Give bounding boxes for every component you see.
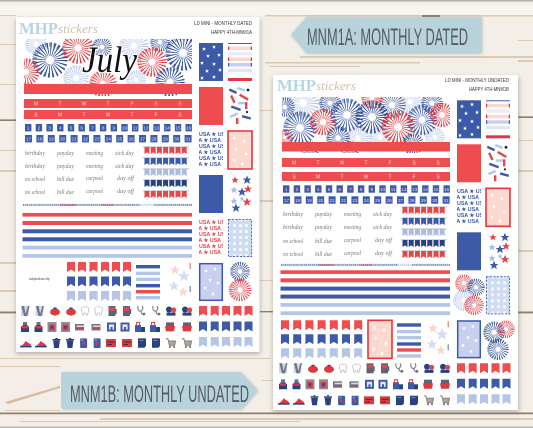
sheet title xyxy=(194,21,252,36)
panel: firecrackers xyxy=(486,144,510,182)
panel: USA blue xyxy=(199,132,223,166)
script event labels: day off xyxy=(375,237,393,244)
script event labels: day off xyxy=(375,250,393,257)
script event labels: bill due xyxy=(57,189,74,196)
panel: solid blue xyxy=(199,175,223,213)
date squares: 23 xyxy=(352,198,358,203)
date squares: 7 xyxy=(91,126,94,130)
script event labels: no school xyxy=(283,238,303,245)
date squares: 4 xyxy=(59,126,62,130)
script event labels: sick day xyxy=(115,163,134,170)
flag rows xyxy=(67,262,131,301)
banner: MNM1B monthly undated: MNM1B: MONTHLY UNDATED xyxy=(70,381,249,408)
date squares: 1 xyxy=(285,187,288,192)
date squares: 9 xyxy=(371,187,374,192)
script event labels: no school xyxy=(25,189,45,196)
weekday strip two: T xyxy=(388,174,392,180)
panel: USA red: USA ★ USA xyxy=(199,219,229,226)
script event labels: bill due xyxy=(315,251,332,258)
date squares: 14 xyxy=(165,126,170,130)
logo xyxy=(19,19,98,38)
date squares: 6 xyxy=(338,187,341,192)
weekday strip one: M xyxy=(292,160,296,166)
flag rows xyxy=(281,320,362,358)
script event labels: birthday xyxy=(25,150,45,157)
date squares: 10 xyxy=(380,187,385,192)
weekday strip one: S xyxy=(436,160,440,166)
logo: MHP xyxy=(277,76,316,95)
script event labels xyxy=(25,150,135,196)
date squares: 2 xyxy=(38,126,41,130)
date squares: 16 xyxy=(186,126,192,130)
date squares: 20 xyxy=(318,198,324,203)
date squares: 3 xyxy=(306,187,309,192)
sheet title xyxy=(445,78,509,93)
red label bar xyxy=(282,142,450,152)
weekday strip two: S xyxy=(34,112,38,118)
planner icons xyxy=(20,306,192,348)
script event labels: meeting xyxy=(86,150,104,157)
panel: star pattern xyxy=(199,43,223,81)
date squares: 8 xyxy=(102,126,105,130)
panel: stars xyxy=(486,232,510,270)
washi strip xyxy=(23,204,192,206)
panel: checklist xyxy=(228,43,252,81)
date squares: 20 xyxy=(60,136,66,142)
planner icons xyxy=(278,363,450,405)
date squares: 17 xyxy=(26,136,31,142)
date squares: 19 xyxy=(307,198,312,203)
panel: pink dotted wide xyxy=(368,320,392,358)
weekday strip one: M xyxy=(34,102,38,108)
red label bar xyxy=(24,84,192,94)
script event labels: meeting xyxy=(86,163,104,170)
date squares: 25 xyxy=(375,198,381,203)
date squares: 13 xyxy=(412,187,418,192)
weekday strip one: F xyxy=(130,102,134,108)
panel: pink dotted xyxy=(228,131,252,169)
date squares: 11 xyxy=(133,126,138,130)
panel: solid blue xyxy=(457,232,481,270)
script event labels: sick day xyxy=(373,224,392,231)
panel: small fireworks xyxy=(228,263,252,301)
weekday strip one: T xyxy=(316,160,320,166)
script event labels: meeting xyxy=(344,211,362,218)
script event labels: no school xyxy=(283,251,303,258)
date squares: 22 xyxy=(83,136,88,142)
banner: MNM1B monthly undated xyxy=(61,372,258,410)
date squares: 13 xyxy=(154,126,160,130)
script event labels: payday xyxy=(56,150,74,157)
date squares: 4 xyxy=(317,187,320,192)
weekday strip two: T xyxy=(130,112,134,118)
panel: USA blue: USA ★ USA xyxy=(449,194,479,201)
month script: July: July xyxy=(82,40,138,81)
weekday strip two: F xyxy=(412,174,416,180)
panel: USA red: USA ★ USA xyxy=(191,249,221,256)
panel: fireworks tile xyxy=(455,276,484,314)
panel: USA blue: USA ★ USA xyxy=(449,206,479,213)
script event labels: birthday xyxy=(283,224,303,231)
date squares: 3 xyxy=(48,126,51,130)
weekday strip one: S xyxy=(178,102,182,108)
panel: gingham xyxy=(228,219,252,257)
panel: gingham xyxy=(486,276,510,314)
weekday strip one xyxy=(282,158,450,167)
logo: stickers xyxy=(58,21,98,36)
weekday strip one: W xyxy=(340,160,345,166)
script event labels: carpool xyxy=(344,250,361,257)
sticker sheet: dated xyxy=(14,17,260,354)
date squares: 19 xyxy=(49,136,54,142)
script event labels: sick day xyxy=(373,211,392,218)
script event labels: payday xyxy=(56,163,74,170)
date squares: 25 xyxy=(117,136,123,142)
weekday strip two xyxy=(282,172,450,181)
date squares: 26 xyxy=(387,198,392,203)
panel: USA blue: USA ★ USA xyxy=(191,161,221,168)
weekday strip two: W xyxy=(106,112,111,118)
script event labels: carpool xyxy=(344,237,361,244)
date squares: 26 xyxy=(129,136,134,142)
logo xyxy=(277,76,356,95)
sheet title: HAPPY 4TH-MNM1A xyxy=(211,30,252,36)
side flags xyxy=(199,306,252,347)
date squares: 7 xyxy=(349,187,352,192)
date squares: 24 xyxy=(364,198,369,203)
weekday strip two: S xyxy=(178,112,182,118)
panel: USA red: USA ★ USA xyxy=(191,237,221,244)
panel: USA blue: USA ★ USA xyxy=(199,143,229,150)
date squares: 22 xyxy=(341,198,346,203)
sheet title: HAPPY 4TH-MNM1B xyxy=(469,87,509,93)
weekday strip two xyxy=(24,110,192,119)
weekday strip two: S xyxy=(292,174,296,180)
full-width colour bars xyxy=(22,213,192,258)
weekday strip two: M xyxy=(316,174,320,180)
date squares: 30 xyxy=(432,198,438,203)
panel: USA red xyxy=(199,220,223,254)
logo: MHP xyxy=(19,19,58,38)
side flags xyxy=(457,363,510,404)
script event labels: bill due xyxy=(57,176,74,183)
date squares: 2 xyxy=(296,187,299,192)
pennant banners xyxy=(143,147,189,198)
panel: pink dotted xyxy=(486,188,510,226)
panel: USA blue: USA ★ USA xyxy=(199,131,229,138)
panel: pale floral xyxy=(425,320,450,359)
full-width colour bars xyxy=(280,270,450,315)
date squares: 15 xyxy=(433,187,439,192)
weekday strip two: M xyxy=(58,112,62,118)
date squares: 31 xyxy=(186,136,191,142)
date squares: 6 xyxy=(80,126,83,130)
script event labels: day off xyxy=(117,188,135,195)
date squares: 11 xyxy=(391,187,396,192)
panel: solid red xyxy=(457,144,481,182)
sheet title: LD MINI - MONTHLY UNDATED xyxy=(445,78,509,84)
panel: star pattern xyxy=(457,100,481,138)
weekday strip one: S xyxy=(412,160,416,166)
script event labels: day off xyxy=(117,175,135,182)
panel: USA blue: USA ★ USA xyxy=(457,188,487,195)
date squares: 29 xyxy=(163,136,168,142)
washi strip xyxy=(281,264,450,266)
panel: USA blue: USA ★ USA xyxy=(191,137,221,144)
panel: USA blue: USA ★ USA xyxy=(457,212,487,219)
logo: stickers xyxy=(316,78,356,93)
stripe block xyxy=(136,265,160,299)
script event labels: no school xyxy=(25,176,45,183)
date squares: 24 xyxy=(106,136,111,142)
script event labels xyxy=(283,211,393,258)
panel: USA red: USA ★ USA xyxy=(199,243,229,250)
weekday strip one: S xyxy=(154,102,158,108)
date squares: 18 xyxy=(37,136,43,142)
date squares: 1 xyxy=(27,126,30,130)
date squares: 31 xyxy=(444,198,449,203)
panel: USA blue: USA ★ USA xyxy=(191,149,221,156)
panel: USA blue: USA ★ USA xyxy=(199,155,229,162)
date squares xyxy=(283,185,450,204)
date squares: 8 xyxy=(360,187,363,192)
panel: stars xyxy=(228,175,252,213)
weekday strip one: T xyxy=(364,160,368,166)
date squares: 21 xyxy=(330,198,335,203)
weekday strip two: F xyxy=(154,112,158,118)
date squares: 21 xyxy=(72,136,77,142)
panel: solid red xyxy=(199,87,223,125)
stripe block xyxy=(397,323,421,358)
script event labels: birthday xyxy=(25,163,45,170)
independence day label: independence day xyxy=(29,277,50,281)
banner: MNM1A monthly dated xyxy=(291,17,482,54)
fireworks header xyxy=(24,39,192,96)
weekday strip one: F xyxy=(388,160,392,166)
sticker sheet: undated xyxy=(273,75,519,412)
date squares: 18 xyxy=(295,198,301,203)
weekday strip two: T xyxy=(82,112,86,118)
fireworks header xyxy=(282,97,450,153)
panel: USA red: USA ★ USA xyxy=(191,225,221,232)
date squares: 30 xyxy=(174,136,180,142)
panel: pale floral xyxy=(167,262,192,301)
pennant banners xyxy=(401,207,447,258)
script event labels: payday xyxy=(314,211,332,218)
script event labels: birthday xyxy=(283,211,303,218)
date squares: 14 xyxy=(423,187,428,192)
weekday strip one: W xyxy=(82,102,87,108)
panel: USA red: USA ★ USA xyxy=(199,231,229,238)
script event labels: sick day xyxy=(115,150,134,157)
panel: checklist xyxy=(486,100,510,138)
script event labels: carpool xyxy=(86,175,103,182)
script event labels: meeting xyxy=(344,224,362,231)
panel: lavender stars xyxy=(199,263,223,301)
panel: USA blue: USA ★ USA xyxy=(449,218,479,225)
date squares: 15 xyxy=(175,126,181,130)
script event labels: payday xyxy=(314,224,332,231)
panel: USA blue: USA ★ USA xyxy=(457,200,487,207)
date squares xyxy=(25,124,192,142)
weekday strip one: T xyxy=(106,102,110,108)
date squares: 5 xyxy=(328,187,331,192)
weekday strip two: S xyxy=(436,174,440,180)
weekday strip two: T xyxy=(340,174,344,180)
weekday strip one: T xyxy=(58,102,62,108)
date squares: 12 xyxy=(143,126,149,130)
date squares: 27 xyxy=(140,136,145,142)
date squares: 5 xyxy=(70,126,73,130)
script event labels: bill due xyxy=(315,238,332,245)
translated shared layout xyxy=(278,100,514,405)
date squares: 16 xyxy=(444,187,450,192)
weekday strip two: W xyxy=(364,174,369,180)
panel: USA blue xyxy=(457,188,481,224)
panel: lavender stars xyxy=(457,320,481,358)
date squares: 9 xyxy=(113,126,116,130)
panel: small fireworks xyxy=(485,320,514,359)
script event labels: carpool xyxy=(86,188,103,195)
date squares: 23 xyxy=(94,136,100,142)
date squares: 29 xyxy=(421,198,426,203)
date squares: 28 xyxy=(409,198,415,203)
date squares: 12 xyxy=(401,187,407,192)
date squares: 27 xyxy=(398,198,403,203)
date squares: 28 xyxy=(151,136,157,142)
date squares: 10 xyxy=(122,126,127,130)
date squares: 17 xyxy=(284,198,289,203)
weekday strip one xyxy=(24,99,192,108)
panel: firecrackers xyxy=(228,87,252,125)
sheet title: LD MINI - MONTHLY DATED xyxy=(194,21,252,27)
